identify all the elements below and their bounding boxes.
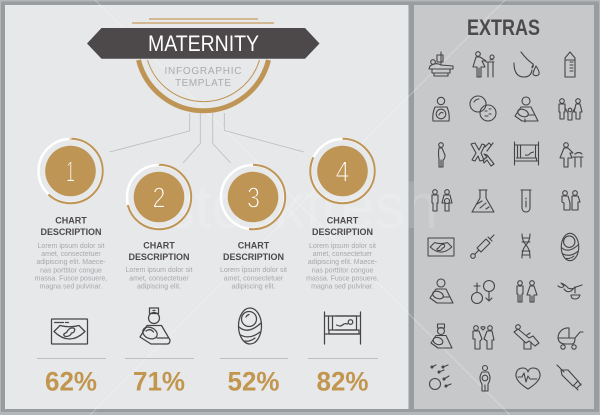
icon: hospital bed with IV (429, 52, 453, 76)
percentage 71: 71% (133, 366, 185, 396)
icon: gender symbols (472, 280, 494, 304)
description 4: massa. Fusce posuere, (306, 276, 379, 282)
icon: pregnant woman (438, 143, 445, 167)
description 3: amet, consectetuer (224, 276, 284, 282)
icon: ultrasound small (428, 238, 454, 256)
icon: woman with baby on table (560, 143, 583, 167)
chart 4 ring: 4 (336, 156, 350, 188)
description 1: adipiscing elit. Maece- (36, 259, 106, 266)
icon: couple in love (473, 326, 494, 349)
description 4: Lorem ipsum dolor sit (309, 243, 376, 250)
description 4: magna sed pulvinar. (311, 284, 374, 290)
percentage 82: 82% (316, 366, 368, 396)
subtitle: INFOGRAPHIC (164, 66, 242, 77)
icon: breast with milk drop (514, 52, 539, 77)
icon: crib (324, 312, 360, 344)
panel: extras (414, 5, 594, 409)
icon: pregnant woman front (480, 366, 490, 391)
percentage 52: 52% (228, 366, 280, 396)
icon: test tube (521, 190, 531, 212)
chart 3 ring: 3 (247, 182, 260, 214)
chart 1 ring (38, 139, 103, 203)
watermark: stockfresh (165, 170, 438, 242)
description 1: magna sed pulvinar. (40, 284, 102, 290)
subtitle (164, 66, 242, 89)
description 2: DESCRIPTION (128, 252, 190, 262)
icon: crib small (514, 142, 538, 165)
icon: baby bottle (565, 52, 575, 77)
icon: man and woman (517, 281, 537, 302)
icon: nurse holding baby (140, 308, 170, 344)
icon: laboratory flask (472, 190, 494, 212)
icon: pregnant couple (432, 190, 452, 211)
description 4: DESCRIPTION (312, 227, 373, 237)
icon: woman weighing baby (473, 52, 494, 77)
description 1: nas porttitor congue (40, 268, 102, 274)
icon: egg cells (470, 96, 496, 121)
title banner (87, 28, 320, 59)
icon: mother holding baby 2 (430, 279, 453, 303)
title banner: MATERNITY (148, 31, 259, 56)
title decoration: gold lines (132, 19, 274, 23)
chart 1 ring: 1 (66, 156, 75, 188)
description 4: amet, consectetuer (313, 251, 373, 258)
icon: swaddled baby (238, 308, 262, 344)
description 2 (126, 240, 193, 290)
icon: chromosomes (471, 143, 494, 166)
description 3: CHART (238, 240, 270, 250)
chart 4 ring (310, 139, 375, 203)
description 4: adipiscing elit. Maece- (308, 259, 378, 266)
description 1: DESCRIPTION (40, 227, 102, 237)
chart 2 ring (127, 165, 191, 229)
icon: DNA (522, 234, 530, 258)
description 4 (306, 216, 379, 290)
chart 3 ring (221, 165, 285, 229)
icon: swaddled baby small (561, 233, 579, 261)
icon: family (559, 99, 582, 120)
description 2: amet, consectetuer (129, 276, 189, 282)
description 1: massa. Fusce posuere, (35, 276, 107, 282)
description 4: nas porttitor congue (312, 268, 374, 274)
extras heading: EXTRAS (467, 15, 540, 40)
description 1 (35, 216, 107, 290)
description 1: Lorem ipsum dolor sit (38, 243, 105, 250)
icon: gynecological chair (514, 325, 539, 349)
chart 2 ring: 2 (152, 182, 166, 214)
connector lines (110, 113, 304, 163)
icon: nurse holding baby small (431, 324, 452, 348)
divider lines (37, 358, 378, 360)
icon: sperm and egg (430, 365, 451, 390)
subtitle: TEMPLATE (175, 78, 231, 89)
description 1: amet, consectetuer (41, 251, 101, 258)
description 3 (220, 240, 287, 290)
icon: baby stroller (558, 328, 583, 349)
panel: main infographic (5, 5, 408, 409)
description 3: Lorem ipsum dolor sit (220, 267, 287, 274)
percentage 62: 62% (45, 366, 97, 396)
description 2: Lorem ipsum dolor sit (126, 267, 193, 274)
icon: medical syringe (557, 365, 581, 390)
title decoration: gold arcs (138, 60, 268, 111)
description 3: adipiscing elit. (232, 284, 276, 290)
description 2: CHART (143, 240, 175, 250)
description 3: DESCRIPTION (223, 252, 284, 262)
icon: vaccine syringe (471, 235, 494, 258)
icon: mother holding baby (515, 97, 538, 122)
description 2: adipiscing elit. (137, 284, 181, 290)
icon: stork with baby (558, 283, 582, 299)
description 1: CHART (55, 216, 87, 226)
icon: couple holding hands (562, 191, 580, 210)
icon: ultrasound scan (52, 319, 88, 344)
description 4: CHART (327, 216, 359, 226)
icon: pregnant belly (433, 97, 449, 121)
icon: heart with pulse (516, 368, 540, 389)
